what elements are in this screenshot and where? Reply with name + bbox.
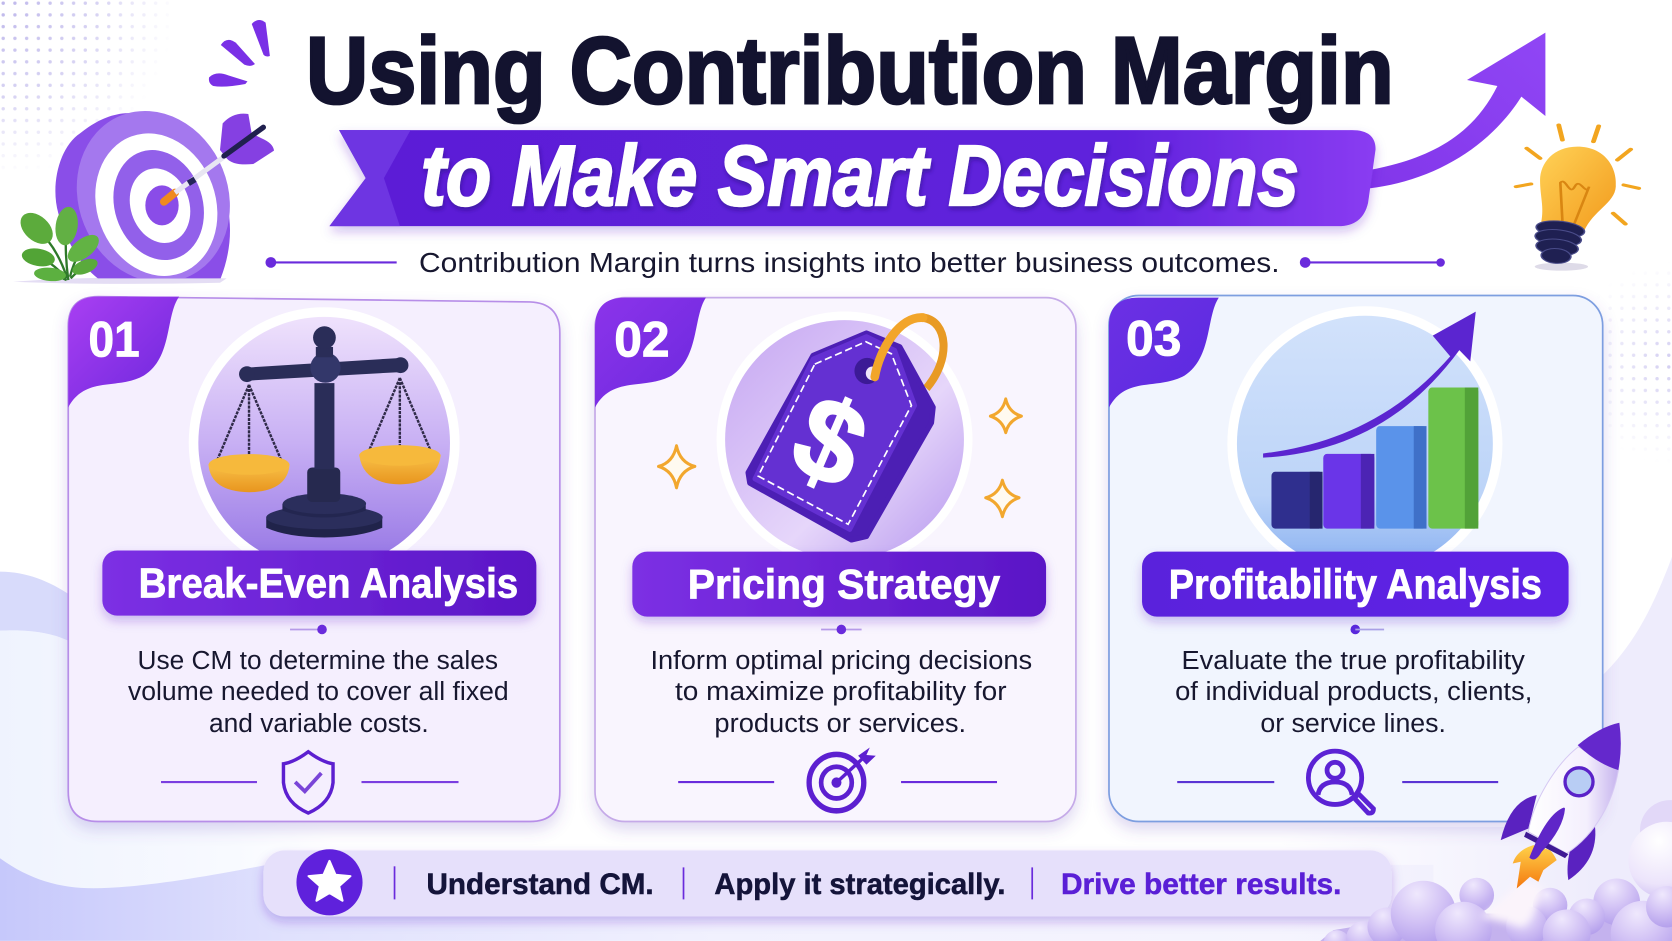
heading pill xyxy=(102,551,536,616)
description: volume needed to cover all fixed xyxy=(128,678,509,706)
icon: person magnifier xyxy=(1308,751,1373,813)
panel: profitability analysis xyxy=(1109,296,1603,822)
number badge 02 xyxy=(595,298,706,408)
number badge 01 xyxy=(68,297,179,408)
background waves xyxy=(0,557,1672,941)
bottom summary bar: Apply it strategically. xyxy=(714,868,1006,901)
heading pill: Break-Even Analysis xyxy=(139,559,518,606)
tagline: Contribution Margin turns insights into better business outcomes. xyxy=(419,247,1280,278)
icon: rocket xyxy=(1501,723,1621,888)
icon: light bulb xyxy=(1516,125,1639,271)
number badge 03: 03 xyxy=(1126,310,1181,366)
icon: star badge xyxy=(296,849,363,915)
tagline xyxy=(266,247,1445,278)
halftone dots right xyxy=(1608,284,1670,439)
number badge 03 xyxy=(1109,298,1219,408)
illustration: growth bar chart xyxy=(1227,306,1502,581)
title: Using Contribution Margin xyxy=(306,18,1394,124)
description: Use CM to determine the sales xyxy=(138,647,498,675)
clouds xyxy=(1320,800,1672,941)
sparkle icons xyxy=(659,399,1021,517)
illustration: price tag xyxy=(717,312,972,568)
icon: target xyxy=(809,747,876,811)
ribbon text: to Make Smart Decisions xyxy=(421,129,1299,224)
panel: break-even analysis xyxy=(68,297,560,822)
panel: pricing strategy xyxy=(595,298,1076,822)
icon: burst marks xyxy=(209,20,270,87)
heading pill xyxy=(1142,552,1569,617)
heading pill: Pricing Strategy xyxy=(688,561,1000,608)
halftone dots top left xyxy=(2,2,157,158)
number badge 02: 02 xyxy=(614,311,670,367)
bottom summary bar xyxy=(263,849,1392,916)
description xyxy=(128,647,509,738)
heading pill: Profitability Analysis xyxy=(1169,561,1542,608)
growth arrow xyxy=(1369,33,1545,188)
description: or service lines. xyxy=(1260,710,1446,738)
description: Evaluate the true profitability xyxy=(1181,647,1525,675)
icon: green leaves xyxy=(15,205,104,282)
illustration: balance scale xyxy=(189,307,460,578)
description: Inform optimal pricing decisions xyxy=(650,647,1032,675)
description: to maximize profitability for xyxy=(675,678,1007,706)
illustration: price tag: $ xyxy=(775,369,884,515)
description: of individual products, clients, xyxy=(1175,678,1532,706)
bottom summary bar: Drive better results. xyxy=(1061,868,1341,901)
description xyxy=(1175,647,1532,738)
ribbon banner xyxy=(329,130,1376,226)
heading pill xyxy=(632,552,1046,617)
description: products or services. xyxy=(714,710,966,738)
number badge 01: 01 xyxy=(89,311,140,367)
bottom summary bar: Understand CM. xyxy=(427,868,654,901)
description xyxy=(650,647,1032,738)
description: and variable costs. xyxy=(209,710,429,738)
icon: shield check xyxy=(283,752,333,813)
icon: target with dart xyxy=(13,88,274,306)
